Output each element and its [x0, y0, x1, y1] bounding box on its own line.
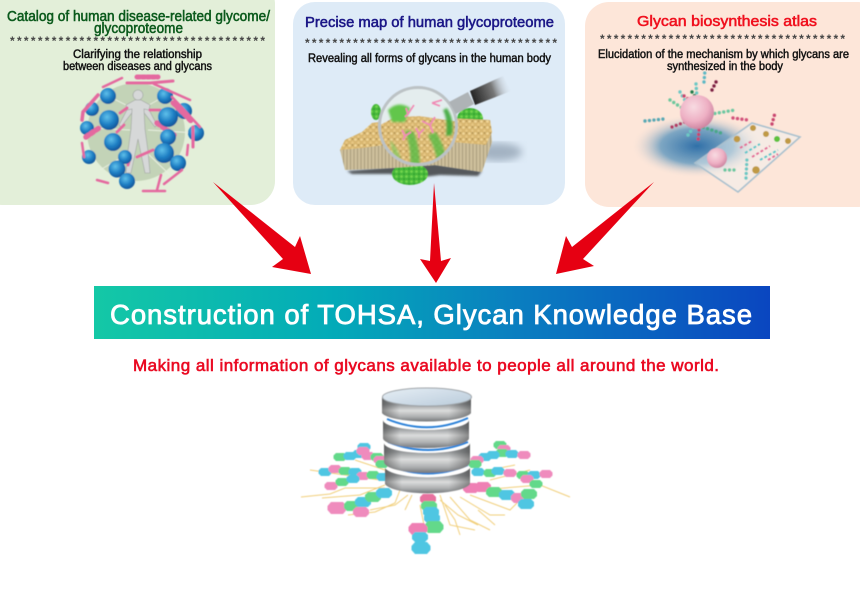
panel 1 divider stars: ************************************* [10, 34, 265, 48]
illustration: human body surrounded by glycan spheres [80, 77, 204, 191]
chip dots [734, 125, 791, 174]
disc 3 [384, 443, 470, 473]
green proteins [371, 104, 483, 185]
arrow: left panel to banner [213, 182, 311, 274]
arrow: center panel to banner [420, 183, 451, 283]
panel 2 description: Revealing all forms of glycans in the human body [308, 53, 551, 65]
illustration: cell with glycans over chip [631, 70, 800, 192]
arrow: right panel to banner [556, 182, 654, 274]
illustration: magnifying glass over cell membrane [340, 76, 522, 185]
pink cell with glycan spikes [645, 70, 775, 178]
panel: glycan biosynthesis atlas [585, 2, 860, 207]
database top [382, 388, 472, 406]
panel 2 divider stars: ************************************* [305, 36, 557, 50]
magnifier handle [449, 92, 474, 114]
gold circuit traces [301, 460, 570, 535]
illustration: database with glycan circuit [301, 388, 570, 554]
human figure [119, 90, 157, 173]
lipid membrane [340, 117, 492, 172]
database cylinder [382, 388, 472, 493]
disc 2 [383, 420, 469, 448]
panel 3 description: synthesized in the body [667, 61, 783, 73]
panel 2 title: Precise map of human glycoproteome [305, 14, 554, 31]
glass chip [695, 123, 800, 192]
panel 1 title: glycoproteome [94, 20, 183, 37]
panel: disease-related glycome catalog [0, 0, 275, 205]
subtitle: Making all information of glycans available to people all around the world. [133, 356, 719, 375]
membrane shadows [474, 143, 522, 161]
panel 1 title: Catalog of human disease-related glycome/ [7, 8, 271, 25]
banner: Construction of TOHSA [94, 286, 770, 339]
panel 3 description [598, 49, 849, 73]
panel 3 divider stars: ************************************ [600, 32, 845, 46]
panel 3 title: Glycan biosynthesis atlas [637, 13, 817, 30]
disc 4 [385, 468, 470, 493]
chip glycan rows [740, 141, 778, 160]
panel 1 description: Clarifying the relationship [73, 49, 202, 61]
pink glycan chains (front) [82, 77, 200, 191]
banner text: Construction of TOHSA, Glycan Knowledge Base [110, 299, 752, 330]
panel 1 description [63, 49, 212, 73]
panel 3 description: Elucidation of the mechanism by which glycans are [598, 49, 849, 61]
panel: precise map of glycoproteome [293, 2, 565, 205]
disc 1 [382, 397, 471, 422]
panel 1 description: between diseases and glycans [63, 61, 212, 73]
blue spheres [80, 88, 204, 189]
panel 1 title [7, 8, 271, 37]
glycan hexagon chains [318, 441, 552, 554]
magnifying lens [380, 88, 456, 164]
pink glycan chains (behind spheres) [117, 108, 174, 165]
